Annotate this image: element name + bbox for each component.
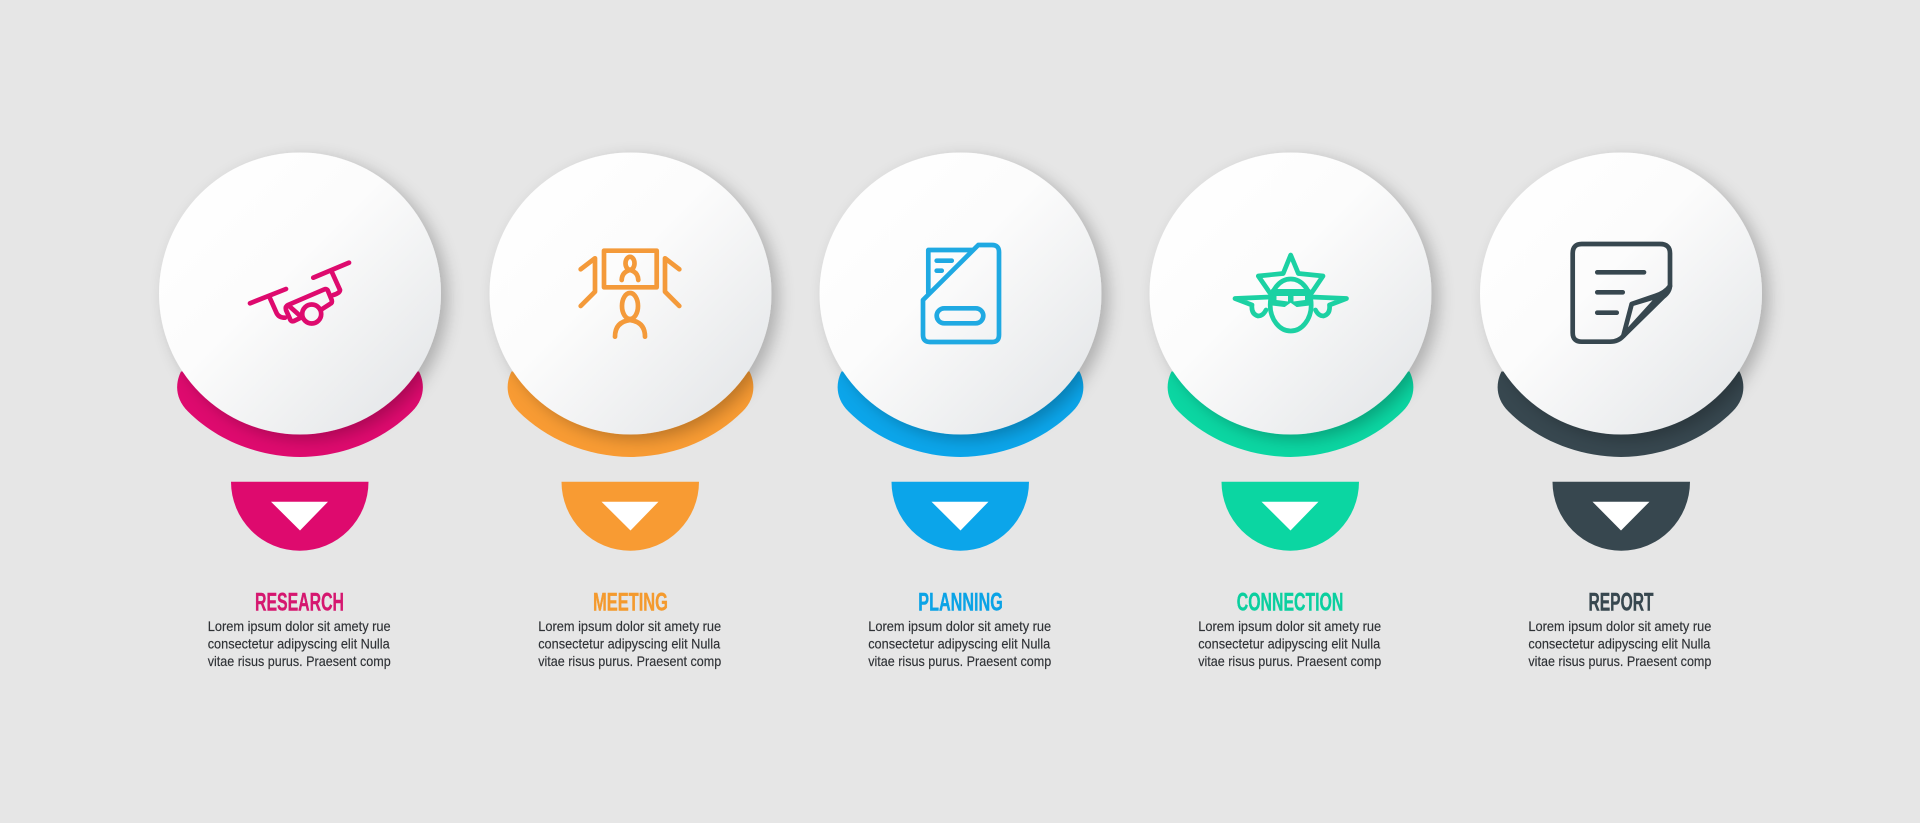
crescent: connection: [1168, 372, 1413, 457]
text: research: vitae risus purus. Praesent comp: [208, 653, 391, 669]
text: research: Lorem ipsum dolor sit amety rue: [208, 618, 391, 634]
circle: research: [159, 152, 441, 434]
semicircle badge: report: [1552, 482, 1690, 551]
arrow: planning: [932, 502, 988, 530]
icon: note: [1573, 244, 1670, 342]
semicircle badge: connection: [1222, 482, 1359, 551]
text: planning: Lorem ipsum dolor sit amety rue: [868, 618, 1051, 634]
text: connection: Lorem ipsum dolor sit amety rue: [1198, 618, 1381, 634]
heading: connection: CONNECTION: [1237, 588, 1343, 616]
semicircle badge: meeting: [562, 482, 699, 551]
arrow: connection: [1262, 502, 1318, 530]
text: planning: vitae risus purus. Praesent comp: [868, 653, 1051, 669]
crescent: planning: [838, 372, 1083, 457]
icon: video meeting: [581, 251, 679, 337]
panel: planning: [820, 152, 1102, 669]
circle: meeting: [490, 152, 772, 434]
arrow: meeting: [602, 502, 658, 530]
circle: report: [1480, 152, 1762, 434]
heading: report: REPORT: [1588, 588, 1654, 616]
text: research: consectetur adipyscing elit Nulla: [208, 636, 390, 652]
text: meeting: consectetur adipyscing elit Nulla: [538, 636, 720, 652]
text: report: consectetur adipyscing elit Nulla: [1528, 636, 1711, 652]
heading: research: RESEARCH: [255, 588, 344, 616]
crescent: meeting: [508, 372, 753, 457]
semicircle badge: research: [231, 482, 368, 551]
text: connection: vitae risus purus. Praesent comp: [1198, 653, 1381, 669]
icon: folder: [923, 245, 999, 342]
panel: meeting: [490, 152, 772, 669]
semicircle badge: planning: [892, 482, 1029, 551]
crescent: research: [177, 372, 423, 457]
arrow: research: [271, 502, 328, 530]
text: meeting: Lorem ipsum dolor sit amety rue: [538, 618, 721, 634]
heading: planning: PLANNING: [918, 588, 1003, 616]
panel: research: [159, 152, 441, 669]
circle: planning: [820, 152, 1102, 434]
text: report: Lorem ipsum dolor sit amety rue: [1528, 618, 1712, 634]
crescent: report: [1498, 372, 1743, 457]
icon: airplane: [1235, 255, 1346, 331]
panel: report: [1480, 152, 1762, 669]
heading: meeting: MEETING: [593, 588, 668, 616]
text: report: vitae risus purus. Praesent comp: [1528, 653, 1712, 669]
panel: connection: [1150, 152, 1432, 669]
text: connection: consectetur adipyscing elit Nulla: [1198, 636, 1380, 652]
circle: connection: [1150, 152, 1432, 434]
icon: drone: [250, 263, 349, 324]
arrow: report: [1592, 502, 1650, 530]
text: planning: consectetur adipyscing elit Nulla: [868, 636, 1050, 652]
text: meeting: vitae risus purus. Praesent comp: [538, 653, 721, 669]
